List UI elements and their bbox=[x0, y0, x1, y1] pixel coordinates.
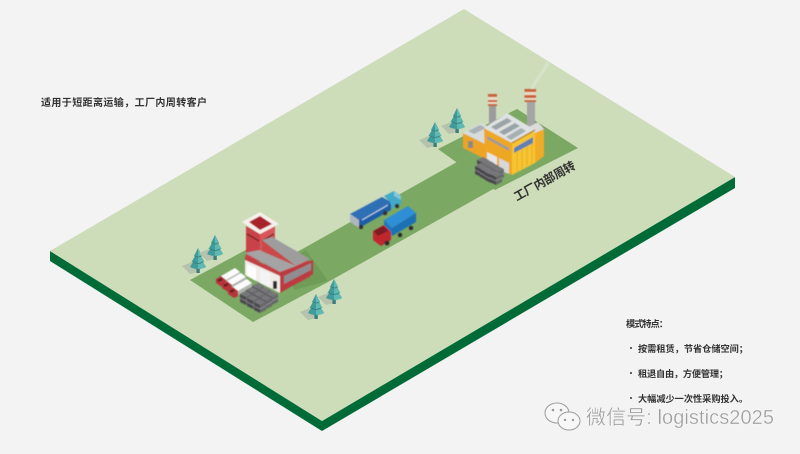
green road between sites bbox=[290, 162, 495, 282]
chimney right bbox=[524, 89, 536, 130]
back wing wall bbox=[262, 240, 310, 292]
side annex right bbox=[535, 129, 544, 163]
blue tanker truck bbox=[350, 191, 401, 229]
main right wall bbox=[512, 130, 535, 175]
watermark text: 微信号: logistics2025 bbox=[586, 406, 774, 429]
doors bbox=[487, 152, 497, 170]
platform bbox=[50, 9, 735, 431]
warehouse ground pad bbox=[190, 238, 328, 322]
factory ground pad bbox=[438, 109, 578, 190]
platform side thickness bbox=[50, 177, 735, 431]
main front wall bbox=[484, 128, 512, 175]
annex left bbox=[463, 133, 485, 159]
tree bbox=[300, 294, 324, 320]
red cargo truck bbox=[373, 206, 416, 246]
factory: yellow plant bbox=[463, 62, 548, 185]
feature 3: 大幅减少一次性采购投入。 bbox=[638, 393, 748, 404]
front wall bbox=[245, 258, 280, 293]
top-left description: 适用于短距离运输，工厂内周转客户 bbox=[41, 96, 207, 109]
feature 1: 按需租赁，节省仓储空间； bbox=[638, 343, 748, 355]
front roof bbox=[245, 250, 296, 272]
doors bbox=[247, 264, 256, 281]
main roof bbox=[484, 113, 535, 143]
site label: 工厂内部周转 bbox=[511, 158, 578, 203]
tower bbox=[242, 212, 279, 262]
features heading: 模式特点： bbox=[626, 318, 668, 329]
tree bbox=[318, 279, 342, 305]
right wall bbox=[280, 260, 313, 293]
feature 2: 租退自由，方便管理； bbox=[638, 368, 728, 380]
mode features panel bbox=[626, 318, 748, 404]
smoke bbox=[532, 62, 548, 90]
watermark: wechat icon bbox=[545, 403, 580, 430]
back wing roof bbox=[262, 237, 310, 266]
warehouse pad building shadow bbox=[286, 250, 328, 290]
warehouse crates bbox=[240, 283, 278, 313]
crates bbox=[475, 157, 504, 185]
tree bbox=[441, 108, 465, 134]
tree bbox=[182, 248, 206, 274]
tree bbox=[199, 235, 223, 261]
white box trucks bbox=[216, 268, 252, 298]
windows bbox=[514, 137, 533, 153]
tree bbox=[419, 122, 443, 148]
chimney left bbox=[488, 94, 497, 127]
platform top surface bbox=[50, 9, 735, 421]
roof edge bbox=[512, 130, 535, 143]
warehouse: red building bbox=[242, 212, 313, 293]
